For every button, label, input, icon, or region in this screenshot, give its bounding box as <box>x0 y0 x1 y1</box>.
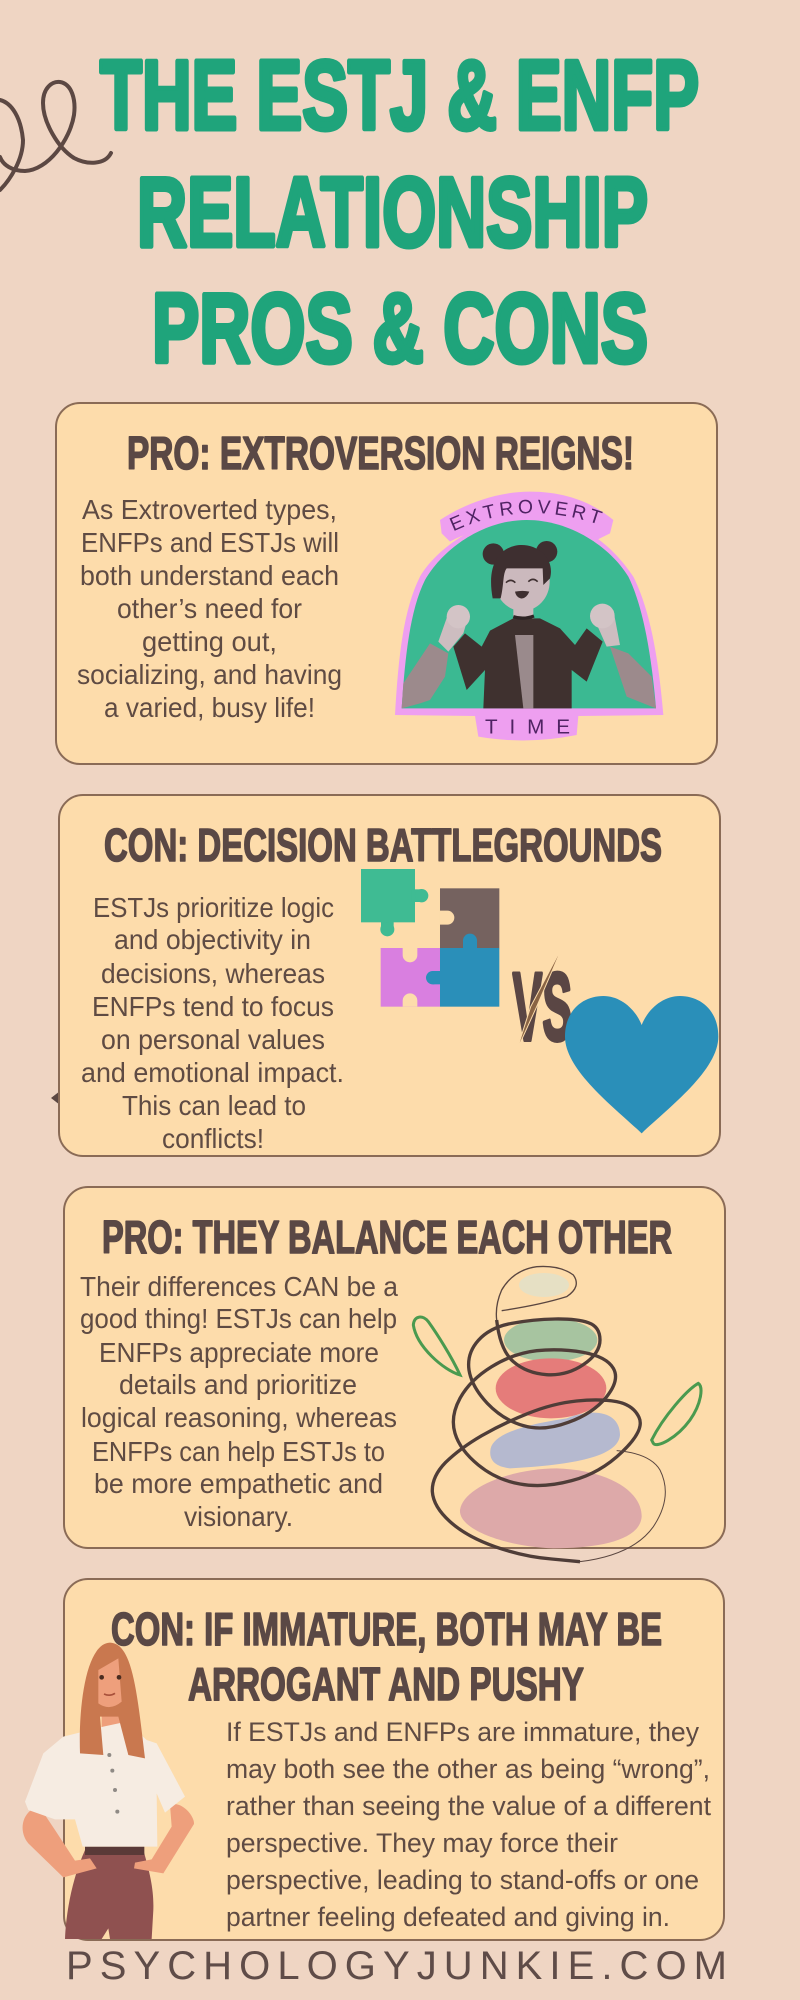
footer: website: PSYCHOLOGYJUNKIE.COM <box>66 1944 727 1988</box>
text: balance: logical reasoning, whereas <box>81 1402 397 1433</box>
icon: slash <box>517 943 564 1051</box>
text: immature: perspective, leading to stand-offs or one <box>226 1865 699 1895</box>
heading: immature <box>111 1603 662 1710</box>
text: extroversion: socializing, and having <box>77 659 342 690</box>
text: immature: perspective. They may force their <box>226 1828 618 1858</box>
text: extroversion: As Extroverted types, <box>82 494 337 525</box>
text: balance: good thing! ESTJs can help <box>80 1303 397 1334</box>
text: balance: Their differences CAN be a <box>80 1271 399 1302</box>
icon: puzzle pieces vs heart <box>361 869 718 1133</box>
title <box>100 40 699 383</box>
icon: puzzle pieces vs heart: VS <box>513 953 572 1061</box>
panel: balance <box>64 1187 725 1562</box>
text: balance: ENFPs can help ESTJs to <box>92 1436 385 1467</box>
text: decision battlegrounds: and emotional impact. <box>81 1057 344 1088</box>
icon: squiggle decoration <box>0 82 111 190</box>
text: decision battlegrounds <box>81 892 344 1154</box>
icon: leaf right <box>652 1383 701 1445</box>
text: balance: details and prioritize <box>119 1369 357 1400</box>
text: immature: partner feeling defeated and giving in. <box>226 1902 670 1932</box>
text: decision battlegrounds: This can lead to <box>122 1090 306 1121</box>
text: extroversion: getting out, <box>142 626 277 657</box>
text: extroversion <box>77 494 342 723</box>
text: extrovert: EXTROVERT <box>450 500 603 531</box>
icon: puzzle pieces <box>361 869 499 1007</box>
text: immature <box>226 1717 711 1932</box>
panel: immature <box>23 1579 724 1940</box>
text: decision battlegrounds: ESTJs prioritize logic <box>93 892 334 923</box>
text: immature: If ESTJs and ENFPs are immature, they <box>226 1717 699 1747</box>
text: immature: may both see the other as being “wrong”, <box>226 1754 710 1784</box>
icon: small arrow <box>51 1091 60 1105</box>
text: balance: visionary. <box>184 1501 293 1532</box>
text: decision battlegrounds: and objectivity in <box>114 924 311 955</box>
text: decision battlegrounds: decisions, whereas <box>101 958 325 989</box>
icon: woman with hands on hips <box>23 1643 194 1939</box>
text: decision battlegrounds: conflicts! <box>162 1123 264 1154</box>
text: time: TIME <box>485 715 570 738</box>
text: balance: be more empathetic and <box>94 1468 383 1499</box>
text: balance <box>80 1271 399 1532</box>
text: extroversion: ENFPs and ESTJs will <box>81 527 339 558</box>
text: immature: rather than seeing the value of a different <box>226 1791 711 1821</box>
icon: heart <box>565 996 718 1133</box>
heading: immature: ARROGANT AND PUSHY <box>188 1658 584 1710</box>
icon: leaf left <box>413 1317 460 1375</box>
panel: decision battlegrounds <box>51 795 720 1156</box>
text: decision battlegrounds: ENFPs tend to focus <box>92 991 334 1022</box>
text: extroversion: a varied, busy life! <box>104 692 315 723</box>
icon: extrovert time sticker <box>395 492 664 740</box>
text: extroversion: other’s need for <box>117 593 302 624</box>
panel: extroversion <box>55 402 718 765</box>
text: balance: ENFPs appreciate more <box>99 1337 379 1368</box>
text: extroversion: both understand each <box>80 560 339 591</box>
icon: balanced stones <box>413 1266 701 1562</box>
text: decision battlegrounds: on personal values <box>101 1024 325 1055</box>
